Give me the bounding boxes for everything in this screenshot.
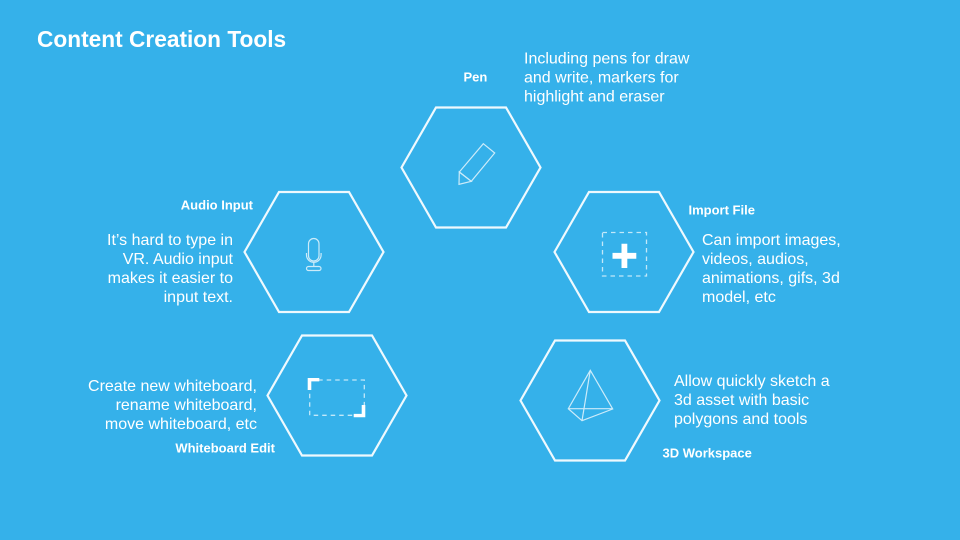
whiteboard hexagon bbox=[268, 336, 406, 456]
icon: dashed box with plus bbox=[602, 232, 646, 276]
audio description: It’s hard to type in bbox=[107, 232, 233, 249]
audio description: makes it easier to bbox=[108, 270, 233, 287]
panel: 3D workspace bbox=[520, 340, 830, 461]
audio description: VR. Audio input bbox=[123, 251, 234, 268]
3D hexagon bbox=[520, 340, 660, 460]
import description: videos, audios, bbox=[702, 251, 809, 268]
3D description: polygons and tools bbox=[674, 411, 807, 428]
whiteboard description: move whiteboard, etc bbox=[105, 416, 257, 433]
3D description: 3d asset with basic bbox=[674, 392, 809, 409]
pen description: highlight and eraser bbox=[524, 88, 665, 106]
import hexagon bbox=[554, 192, 694, 312]
import label: Import File bbox=[688, 203, 755, 218]
import description: animations, gifs, 3d bbox=[702, 270, 840, 287]
audio label: Audio Input bbox=[181, 198, 254, 213]
icon: pencil bbox=[459, 144, 495, 184]
panel: pen bbox=[402, 50, 690, 228]
whiteboard label: Whiteboard Edit bbox=[175, 441, 276, 456]
import description: Can import images, bbox=[702, 232, 841, 249]
3D description: Allow quickly sketch a bbox=[674, 373, 830, 390]
audio description: input text. bbox=[164, 289, 233, 306]
whiteboard description: rename whiteboard, bbox=[116, 397, 257, 414]
icon: pyramid bbox=[568, 370, 613, 421]
3D label: 3D Workspace bbox=[662, 446, 752, 461]
icon: microphone bbox=[306, 238, 321, 270]
panel: whiteboard edit bbox=[88, 336, 406, 456]
panel: import file bbox=[554, 192, 841, 312]
panel: audio input bbox=[107, 192, 384, 312]
pen label: Pen bbox=[464, 70, 487, 85]
import description: model, etc bbox=[702, 289, 776, 306]
pen description: and write, markers for bbox=[524, 70, 679, 86]
title: Content Creation Tools bbox=[37, 26, 286, 52]
whiteboard description: Create new whiteboard, bbox=[88, 378, 257, 395]
audio hexagon bbox=[244, 192, 384, 312]
icon: selection frame bbox=[308, 378, 365, 417]
pen description: Including pens for draw bbox=[524, 50, 690, 68]
pen hexagon bbox=[402, 108, 540, 228]
